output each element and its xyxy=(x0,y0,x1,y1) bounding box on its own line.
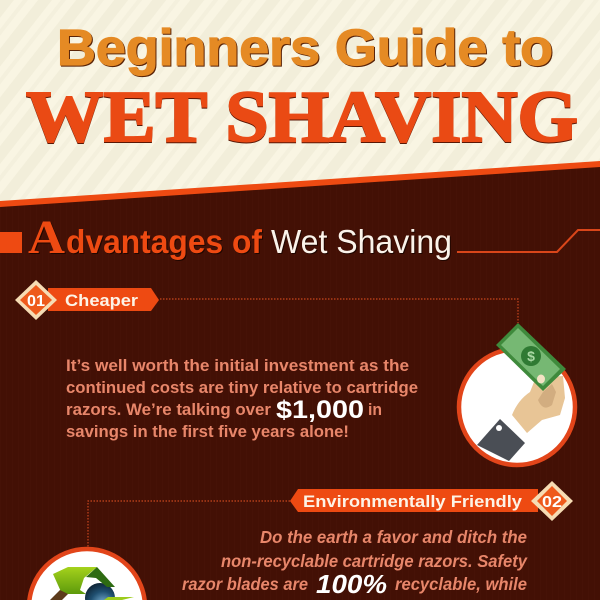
ribbon 02 xyxy=(290,489,538,512)
advantage 02: environmentally friendly xyxy=(29,481,573,600)
badge 01: 01 xyxy=(27,293,45,310)
banknote xyxy=(496,323,566,391)
body text 01: $1,000 xyxy=(276,396,364,424)
ribbon 01 xyxy=(48,288,159,311)
icon: recycling symbol xyxy=(29,549,145,600)
hand xyxy=(512,376,565,433)
section heading xyxy=(0,211,600,264)
icon: hand holding banknote xyxy=(459,323,575,465)
icon: hand holding banknote: $ xyxy=(527,348,535,364)
cuff xyxy=(477,419,525,461)
body text 01: continued costs are tiny relative to cartridge xyxy=(66,378,418,397)
ribbon label: Cheaper: Cheaper xyxy=(65,291,138,310)
badge 02: 02 xyxy=(542,494,562,511)
dotted connector 01 xyxy=(160,299,518,323)
title line: WET SHAVING: WET SHAVING xyxy=(26,76,578,157)
body text 01: in xyxy=(368,400,382,419)
orange header divider xyxy=(0,161,600,207)
body text 01 xyxy=(66,356,418,441)
body text 02: Do the earth a favor and ditch the xyxy=(260,527,527,547)
advantage 01: cheaper xyxy=(15,280,575,465)
body text 02: recyclable, while xyxy=(395,574,527,594)
heading marker block xyxy=(0,232,22,253)
heading text: Wet Shaving xyxy=(271,223,452,260)
dotted connector 02 xyxy=(88,501,290,547)
body text 01: It’s well worth the initial investment as the xyxy=(66,356,409,375)
body text 01: savings in the first five years alone! xyxy=(66,422,349,441)
badge 01 xyxy=(15,280,57,320)
badge 02 xyxy=(531,481,573,521)
title line: Beginners Guide to: Beginners Guide to xyxy=(57,19,553,76)
title xyxy=(26,19,578,157)
body text 01: razors. We’re talking over xyxy=(66,400,271,419)
heading rule xyxy=(457,230,600,252)
cream header panel xyxy=(0,0,600,202)
thumb and palm shading xyxy=(538,384,556,408)
heading text: A xyxy=(28,211,65,264)
heading text: dvantages of xyxy=(66,223,263,260)
body text 02 xyxy=(182,527,528,599)
body text 02: 100% xyxy=(316,569,387,599)
body text 02: non-recyclable cartridge razors. Safety xyxy=(221,551,528,571)
body text 02: razor blades are xyxy=(182,574,308,594)
ribbon label: Environmentally Friendly: Environmentally Friendly xyxy=(303,492,523,511)
